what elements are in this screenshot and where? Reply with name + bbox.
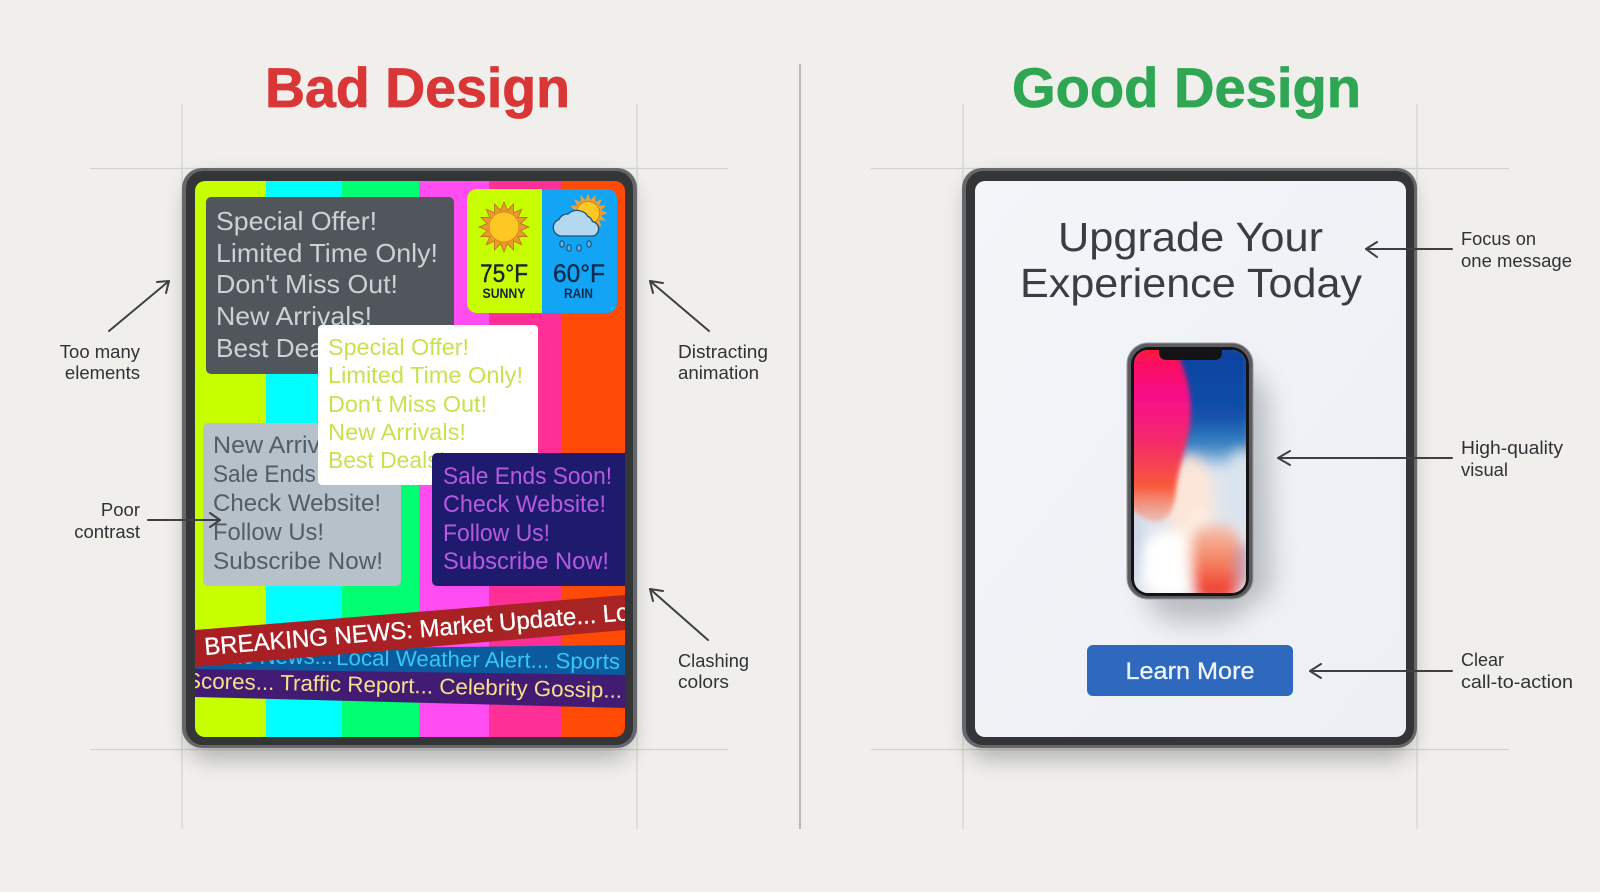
light grey text box: Sale Ends Soon! <box>213 461 381 488</box>
panel: bad design tablet <box>182 168 661 758</box>
weather widget: RAIN <box>564 286 593 301</box>
blue ticker: Local Weather Alert... Sports <box>336 645 620 674</box>
annotation: distracting animation: animation <box>678 362 759 383</box>
weather widget: SUNNY <box>482 286 526 301</box>
blue ticker <box>194 644 625 677</box>
red breaking news ticker: BREAKING NEWS: Market Update... Local <box>203 597 661 661</box>
headline: Upgrade Your <box>1058 214 1323 260</box>
annotation: high-quality visual: visual <box>1461 459 1508 480</box>
annotation: distracting animation <box>650 281 768 383</box>
light grey text box: Check Website! <box>213 490 381 517</box>
annotation: focus on one message: Focus on <box>1461 228 1536 249</box>
white text box: New Arrivals! <box>328 419 466 445</box>
annotation: too many elements: Too many <box>60 341 141 362</box>
dark text box: Best Deals! <box>216 333 350 363</box>
weather widget <box>467 189 617 313</box>
white text box: Best Deals! <box>328 447 445 473</box>
navy text box: Check Website! <box>443 491 606 518</box>
icon: rain cloud <box>553 194 608 251</box>
navy text box: Sale Ends Soon! <box>443 463 612 490</box>
blue ticker: Traffic News... <box>194 644 333 669</box>
call-to-action button: Learn More <box>1126 658 1254 685</box>
light grey text box: Follow Us! <box>213 519 324 546</box>
dark text box: New Arrivals! <box>216 301 372 331</box>
headline <box>1020 214 1363 306</box>
call-to-action button <box>1087 645 1293 696</box>
dark text box: Don't Miss Out! <box>216 269 398 299</box>
weather widget: 75°F <box>480 260 528 288</box>
annotation: clashing colors: Clashing <box>678 650 749 671</box>
light grey text box <box>203 423 401 586</box>
navy text box <box>432 453 632 586</box>
annotation: distracting animation: Distracting <box>678 341 768 362</box>
dark text box <box>206 197 454 374</box>
annotation: clashing colors <box>650 589 749 692</box>
headline: Experience Today <box>1020 260 1363 306</box>
purple ticker: Scores... Traffic Report... Celebrity Gossip... <box>186 668 622 703</box>
white text box <box>318 325 538 485</box>
weather widget: 60°F <box>553 260 605 288</box>
phone image <box>1125 340 1272 622</box>
title: Good Design: Good Design <box>1012 56 1361 119</box>
navy text box: Subscribe Now! <box>443 548 609 575</box>
annotation: focus on one message <box>1366 228 1572 271</box>
white text box: Don't Miss Out! <box>328 391 487 417</box>
background colour stripes <box>195 181 625 737</box>
dark text box: Special Offer! <box>216 206 377 236</box>
white text box: Special Offer! <box>328 334 469 360</box>
navy text box: Follow Us! <box>443 520 550 547</box>
annotation: poor contrast: contrast <box>74 521 140 542</box>
white text box: Limited Time Only! <box>328 362 523 388</box>
title: Bad Design: Bad Design <box>265 56 570 119</box>
annotation: focus on one message: one message <box>1461 250 1572 271</box>
annotation: clear call-to-action: Clear <box>1461 649 1504 670</box>
phone notch <box>1159 349 1222 360</box>
annotation: clear call-to-action <box>1310 649 1573 692</box>
annotation: poor contrast <box>74 499 220 542</box>
annotation: clear call-to-action: call-to-action <box>1461 671 1573 692</box>
light grey text box: New Arrivals! <box>213 432 359 459</box>
annotation: poor contrast: Poor <box>101 499 140 520</box>
icon: sun <box>479 202 529 252</box>
dark text box: Limited Time Only! <box>216 238 438 268</box>
annotation: high-quality visual: High-quality <box>1461 437 1564 458</box>
annotation: clashing colors: colors <box>678 671 729 692</box>
annotation: too many elements: elements <box>65 362 140 383</box>
annotation: high-quality visual <box>1278 437 1564 480</box>
panel: good design tablet <box>962 168 1417 758</box>
light grey text box: Subscribe Now! <box>213 548 383 575</box>
annotation: too many elements <box>60 281 169 383</box>
